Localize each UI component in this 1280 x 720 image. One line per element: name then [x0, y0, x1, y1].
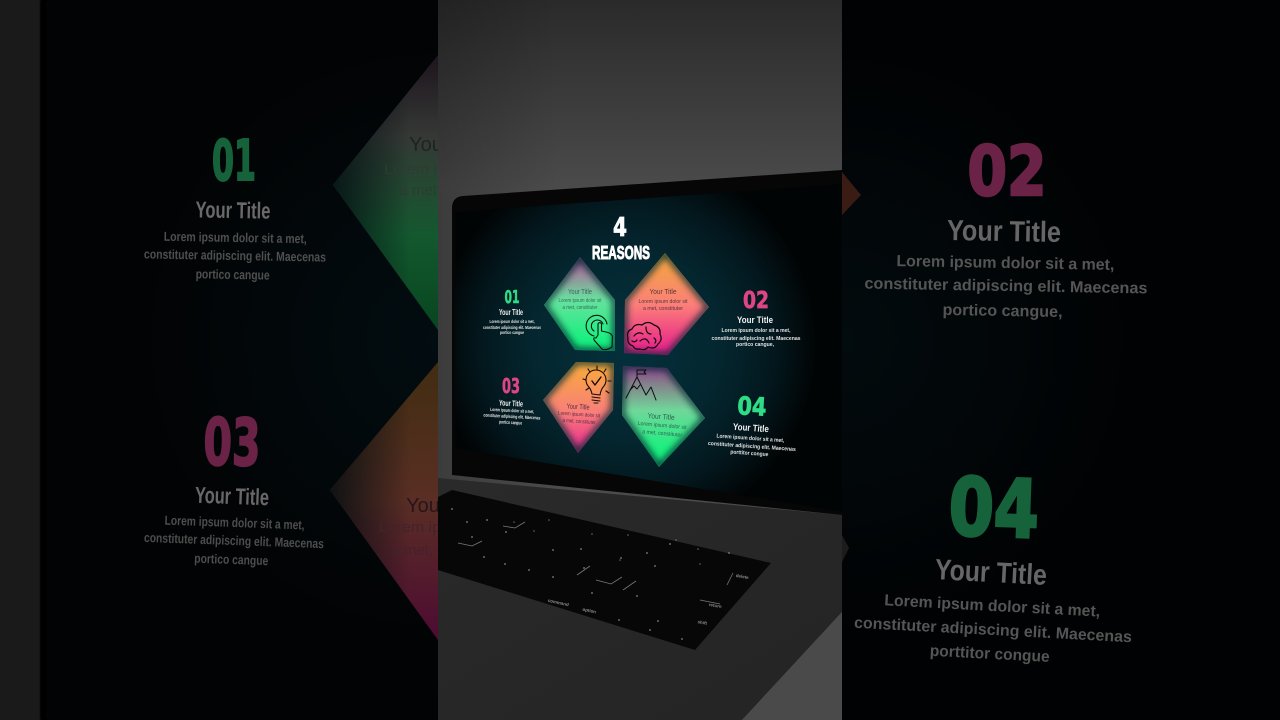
panel 1: green hand — [544, 257, 615, 351]
panel 1 text: a met, constituter — [562, 305, 598, 311]
number 03: 03 — [203, 406, 261, 481]
body — [484, 408, 540, 426]
item 01 label — [483, 287, 541, 336]
body 02: constituter adipiscing elit. Maecenas — [864, 276, 1148, 297]
body: Lorem ipsum dolor sit a met, — [490, 319, 535, 325]
number 04 small: 04 — [737, 391, 767, 422]
panel 2: orange brain — [624, 253, 709, 355]
body: constituter adipiscing elit. Maecenas — [708, 441, 796, 453]
body — [483, 319, 541, 336]
number 02 small: 02 — [743, 288, 769, 314]
body: constituter adipiscing elit. Maecenas — [483, 413, 541, 421]
body: constituter adipiscing elit. Maecenas — [712, 336, 800, 342]
body 02: Lorem ipsum dolor sit a met, — [896, 253, 1115, 274]
photo background — [438, 0, 842, 720]
title 03: Your Title — [195, 482, 269, 510]
item 01 text — [144, 129, 326, 284]
body: portico cangue — [500, 330, 524, 336]
laptop screen — [455, 184, 842, 512]
orange diamond fragment: a met, c — [391, 542, 445, 559]
body 03: Lorem ipsum dolor sit a met, — [164, 513, 305, 532]
body 02: portico cangue, — [942, 302, 1063, 321]
panel 3 text — [558, 403, 600, 424]
panel 3 text: Lorem ipsum dolor sit — [558, 411, 601, 419]
item 04 text — [852, 460, 1134, 670]
body: Lorem ipsum dolor sit a met, — [722, 328, 791, 334]
keyboard: return — [708, 602, 722, 609]
orange diamond fragment: You — [406, 495, 440, 517]
number 02: 02 — [968, 132, 1046, 212]
body 04: constituter adipiscing elit. Maecenas — [854, 615, 1132, 646]
icon: brain — [628, 322, 661, 350]
right blurred panel — [842, 0, 1280, 720]
body 01: Lorem ipsum dolor sit a met, — [164, 229, 307, 246]
panel 3 text: Your Title — [566, 401, 590, 412]
panel 1 text: Your Title — [568, 287, 592, 296]
number 01 small: 01 — [504, 287, 520, 308]
title: Your Title — [499, 398, 524, 409]
orange diamond fragment: Lorem ipsum — [379, 519, 471, 536]
body: porttitor congue — [730, 450, 768, 458]
title: Your Title — [499, 308, 523, 317]
panel 4 text: Your Title — [647, 411, 675, 422]
body — [708, 434, 796, 457]
keyboard — [438, 490, 771, 650]
keyboard: shift — [697, 619, 708, 626]
body: portico cangue — [499, 419, 522, 426]
body — [712, 328, 800, 348]
center laptop photo — [430, 0, 850, 720]
keyboard: command — [547, 598, 569, 607]
title: 4 REASONS — [592, 216, 650, 260]
number 03 small: 03 — [502, 374, 520, 398]
panel 2 text — [638, 288, 688, 311]
item 03 label — [484, 378, 540, 426]
body: portico cangue, — [736, 342, 774, 348]
body 02 — [864, 253, 1148, 322]
title 01: Your Title — [195, 196, 271, 224]
keyboard: delete — [735, 573, 750, 580]
icon: light bulb — [583, 366, 611, 403]
body 01: constituter adipiscing elit. Maecenas — [144, 246, 326, 265]
panel 3 text: a met, constituter — [562, 418, 596, 426]
item 02 label — [712, 288, 800, 348]
green diamond fragment: a met, c — [399, 182, 453, 199]
body 03: portico cangue — [194, 551, 269, 568]
icon: mountain with flag — [626, 370, 656, 400]
green diamond fragment — [333, 55, 438, 330]
title: Your Title — [733, 422, 769, 435]
laptop deck — [438, 478, 842, 720]
body: constituter adipiscing elit. Maecenas — [483, 325, 541, 331]
panel 4 text — [638, 412, 687, 437]
body 01: portico cangue — [196, 266, 270, 283]
green diamond fragment: Lorem ipsum — [384, 161, 476, 178]
keyboard: option — [582, 607, 597, 614]
panel 1 text — [558, 288, 602, 310]
number 04: 04 — [947, 460, 1041, 557]
title 04: Your Title — [934, 554, 1048, 592]
panel 1 text: Lorem ipsum dolor sit — [558, 298, 602, 304]
panel 3: orange bulb — [543, 362, 614, 453]
body 03: constituter adipiscing elit. Maecenas — [144, 530, 324, 551]
green diamond fragment: You — [409, 134, 443, 156]
icon: hand — [586, 315, 612, 350]
panel 4: green mountain — [622, 366, 705, 467]
title: 4 REASONS: 4 — [613, 213, 627, 243]
body 04: porttitor congue — [929, 643, 1050, 666]
item 03 text — [143, 406, 325, 570]
item 04 label — [708, 396, 796, 457]
number 01: 01 — [212, 129, 256, 194]
orange diamond fragment — [330, 362, 438, 640]
laptop lid — [452, 170, 842, 515]
body 04 — [852, 591, 1134, 670]
body 03 — [143, 512, 325, 570]
body: Lorem ipsum dolor sit a met, — [716, 434, 785, 444]
panel 2 text: a met, constituter — [643, 306, 683, 312]
panel 4 text: a met, constituter — [642, 429, 682, 439]
title: 4 REASONS: REASONS — [592, 243, 650, 263]
left blurred panel — [0, 0, 476, 720]
title: Your Title — [737, 315, 773, 325]
title 02: Your Title — [947, 215, 1061, 249]
body 01 — [144, 228, 326, 284]
panel 2 text: Your Title — [650, 287, 676, 296]
panel 4 text: Lorem ipsum dolor sit — [637, 421, 687, 431]
body 04: Lorem ipsum dolor sit a met, — [884, 592, 1101, 621]
item 02 text — [864, 132, 1148, 322]
body: Lorem ipsum dolor sit a met, — [490, 407, 534, 414]
panel 2 text: Lorem ipsum dolor sit — [638, 299, 688, 305]
